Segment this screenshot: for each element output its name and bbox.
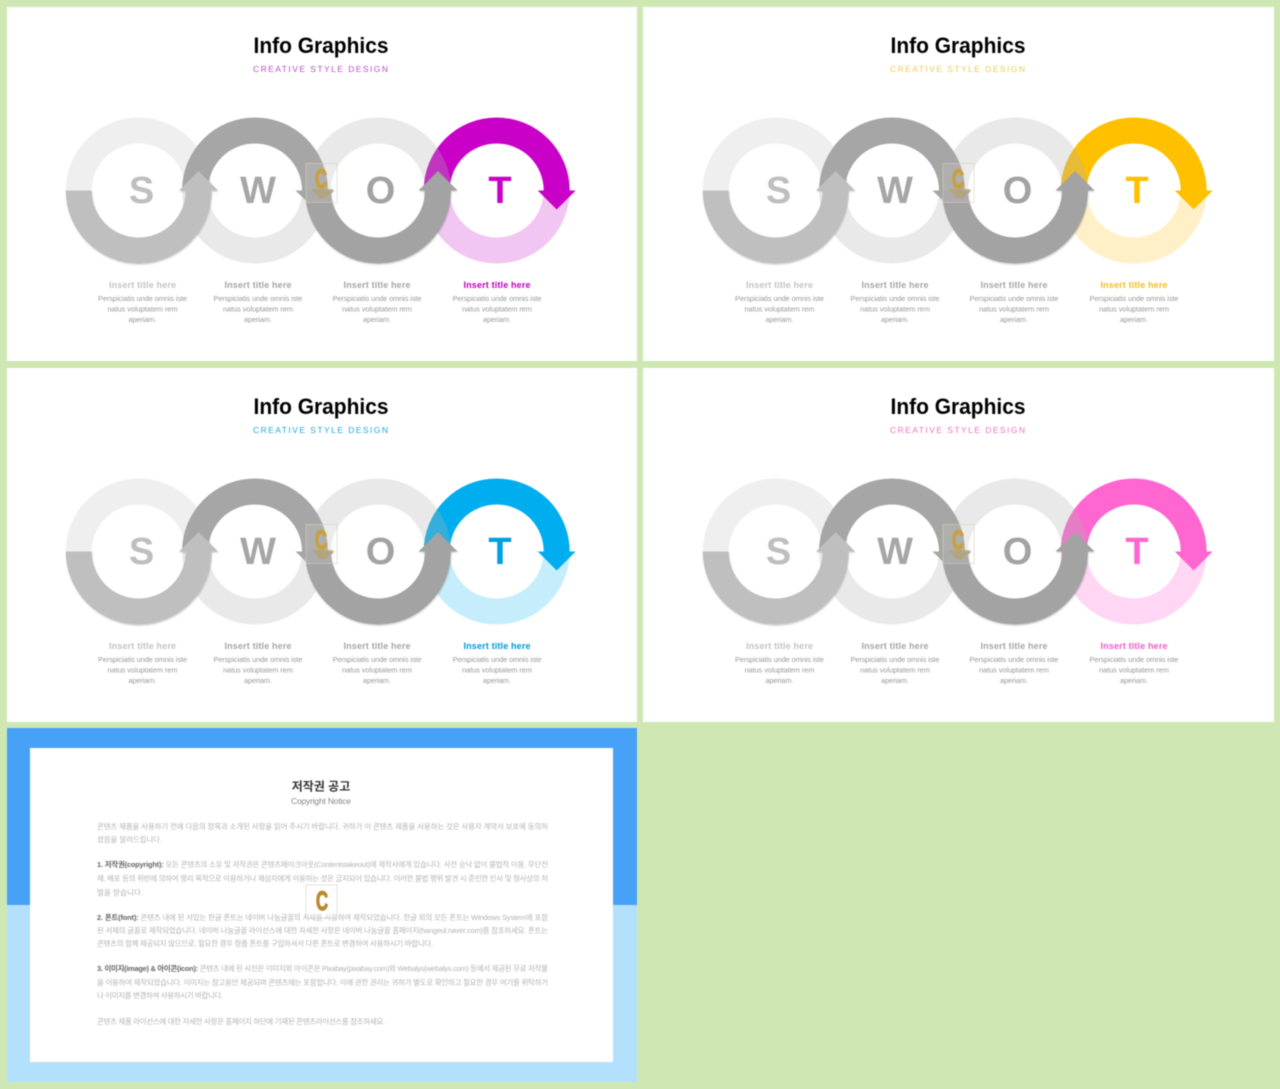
text block: section 1 copyright: 재, 배포 등의 위반에 의하여 영리 목적으로 이용하거나 제삼자에게 이용하는 것은 금지되어 있습니다. 이러한 불법 행위 발견 시 준민한 민사 및 형사상의 처	[97, 874, 548, 883]
letter O: O	[1003, 531, 1032, 573]
caption O: aperiam.	[363, 315, 391, 324]
letter S: S	[766, 170, 791, 212]
letter W: W	[240, 170, 276, 212]
caption O: Insert title here	[344, 641, 410, 651]
caption T	[452, 641, 542, 685]
panel: SWOT magenta	[7, 7, 637, 361]
caption S: Perspiciatis unde omnis iste	[98, 655, 187, 664]
text block: section 2 font: 2. 폰트(font): 콘텐츠 내에 된 서있는 한글 폰트는 네이버 나눔글꼴의 서체를 사용하여 제작되었습니다. 한글 외의 모든 폰트는 Windows System에 포함	[97, 913, 548, 922]
caption W: Insert title here	[862, 280, 928, 290]
letter S: S	[129, 531, 154, 573]
caption T: natus voluptatem rem	[1099, 304, 1169, 314]
text block: intro	[97, 822, 548, 844]
icon: gold C watermark: C	[315, 525, 327, 555]
caption O: natus voluptatem rem	[979, 666, 1049, 674]
text block: section 2 font: 된 서체의 글꼴로 제작되었습니다. 네이버 나눔글꼴 라이선스에 대한 자세한 사항은 네이버 나눔글꼴 홈페이지(hangeul.naver.com)를 참조하세요. 폰트는	[97, 926, 548, 935]
caption T: Insert title here	[464, 280, 530, 290]
caption O: natus voluptatem rem	[342, 304, 412, 314]
caption O: Perspiciatis unde omnis iste	[332, 655, 422, 664]
panel: SWOT blue	[7, 368, 637, 722]
caption O	[970, 280, 1058, 324]
title: Info Graphics	[890, 33, 1026, 58]
icon: gold C watermark: C	[952, 164, 964, 194]
caption W: Perspiciatis unde omnis iste	[850, 655, 940, 664]
caption S: aperiam.	[128, 315, 156, 324]
caption O: Perspiciatis unde omnis iste	[332, 294, 422, 303]
text block: section 2 font: 콘텐츠의 함께 제공되지 않으므로, 필요한 경우 정품 폰트를 구입하셔서 다른 폰트로 변경하여 사용하시기 바랍니다.	[97, 939, 433, 948]
caption S	[98, 280, 187, 324]
caption O: Insert title here	[980, 641, 1048, 651]
letter W: W	[877, 531, 913, 573]
letter T: T	[1125, 531, 1149, 573]
icon: gold C watermark	[306, 164, 337, 202]
caption O: aperiam.	[1000, 676, 1028, 685]
caption S: natus voluptatem rem	[744, 666, 814, 674]
letter T: T	[488, 531, 512, 573]
caption W: natus voluptatem rem	[223, 304, 293, 314]
caption S: natus voluptatem rem	[108, 304, 178, 314]
caption O: Perspiciatis unde omnis iste	[970, 655, 1058, 664]
caption W: natus voluptatem rem	[860, 304, 930, 314]
icon: gold C watermark	[306, 885, 337, 918]
caption O: aperiam.	[1000, 315, 1028, 324]
chart: SWOT interlocking arrows	[66, 478, 576, 624]
caption T: natus voluptatem rem	[462, 304, 532, 314]
caption S: Perspiciatis unde omnis iste	[735, 655, 824, 664]
letter O: O	[366, 531, 395, 573]
text block: section 1 copyright: 벌을 받습니다.	[97, 888, 143, 897]
caption T: natus voluptatem rem	[462, 666, 532, 674]
caption S: Insert title here	[109, 641, 176, 651]
text block: section 3 image and icon	[97, 964, 548, 1000]
caption T: aperiam.	[483, 315, 511, 324]
heading: copyright notice: 저작권 공고	[292, 778, 350, 794]
caption T: natus voluptatem rem	[1099, 666, 1169, 674]
caption T	[452, 280, 542, 324]
caption T: Insert title here	[1100, 641, 1168, 651]
caption S: Perspiciatis unde omnis iste	[735, 294, 824, 303]
caption O: Insert title here	[980, 280, 1048, 290]
caption O: Insert title here	[344, 280, 410, 290]
caption T: Perspiciatis unde omnis iste	[1090, 655, 1178, 664]
icon: gold C watermark	[306, 524, 337, 564]
letter O: O	[1003, 170, 1032, 212]
caption O: aperiam.	[363, 676, 391, 685]
caption W: natus voluptatem rem	[860, 666, 930, 674]
subtitle: CREATIVE STYLE DESIGN	[253, 64, 388, 74]
caption W: Perspiciatis unde omnis iste	[214, 294, 302, 303]
caption T: Insert title here	[464, 641, 530, 651]
caption O	[332, 280, 422, 324]
text block: section 1 copyright: 1. 저작권(copyright): 모든 콘텐츠의 소유 및 저작권은 콘텐츠메이크아웃(Contentstakeout)에 제작사에게 있습니다. 사전 승낙 없이 불법적 이용, 무단전	[97, 860, 548, 869]
chart: SWOT interlocking arrows	[703, 478, 1213, 624]
chart: SWOT interlocking arrows	[703, 118, 1213, 264]
letter T: T	[488, 170, 512, 212]
subtitle: CREATIVE STYLE DESIGN	[890, 425, 1025, 435]
caption T: aperiam.	[483, 676, 511, 685]
letter O: O	[366, 170, 395, 212]
caption W: Insert title here	[224, 280, 292, 290]
caption O	[970, 641, 1058, 685]
text block: section 3 image and icon: 을 이용하여 제작되었습니다. 이미지는 참고용만 제공되며 콘텐츠에는 포함합니다. 이에 관한 권리는 귀하가 별도로 확인하고 필요한 경우 여기를 위탁하거	[97, 978, 548, 987]
caption S: natus voluptatem rem	[744, 304, 814, 314]
panel: SWOT yellow	[643, 7, 1274, 361]
caption W: aperiam.	[881, 315, 909, 324]
caption W	[214, 280, 302, 324]
letter W: W	[877, 170, 913, 212]
letter W: W	[240, 531, 276, 573]
caption W: Perspiciatis unde omnis iste	[850, 294, 940, 303]
caption S: Perspiciatis unde omnis iste	[98, 294, 187, 303]
panel: copyright notice	[7, 728, 637, 1082]
caption T: Perspiciatis unde omnis iste	[452, 655, 542, 664]
caption W	[850, 280, 940, 324]
caption W: Perspiciatis unde omnis iste	[214, 655, 302, 664]
icon: gold C watermark: C	[952, 525, 964, 555]
caption O: natus voluptatem rem	[342, 666, 412, 674]
caption S: aperiam.	[766, 315, 794, 324]
caption S: Insert title here	[746, 280, 813, 290]
title: Info Graphics	[254, 33, 388, 58]
caption S	[735, 280, 824, 324]
letter S: S	[129, 170, 154, 212]
caption S: aperiam.	[766, 676, 794, 685]
subheading: Copyright Notice	[291, 796, 351, 806]
caption W	[850, 641, 940, 685]
text block: section 3 image and icon: 3. 이미지(image) & 아이콘(icon): 콘텐츠 내에 된 사진은 이미지와 아이콘은 Pixabay(pixabay.com)와 Webalys(webalys.com) 등에서 제공된 무료 저작물	[97, 964, 548, 973]
caption O: natus voluptatem rem	[979, 304, 1049, 314]
text block: section 2 font	[97, 913, 548, 948]
text block: closing note: 콘텐츠 제품 라이선스에 대한 자세한 사항은 홈페이지 하단에 기재된 콘텐츠라이선스를 참조하세요.	[97, 1017, 385, 1026]
caption W: Insert title here	[224, 641, 292, 651]
panel: SWOT pink	[643, 368, 1274, 722]
caption T	[1090, 280, 1178, 324]
caption T: aperiam.	[1120, 676, 1148, 685]
caption S: aperiam.	[128, 676, 156, 685]
caption T: Insert title here	[1100, 280, 1168, 290]
caption W: natus voluptatem rem	[223, 666, 293, 674]
caption S: Insert title here	[109, 280, 176, 290]
subtitle: CREATIVE STYLE DESIGN	[253, 425, 388, 435]
icon: gold C watermark: C	[315, 164, 327, 194]
caption W: aperiam.	[244, 676, 272, 685]
title: Info Graphics	[254, 394, 388, 419]
caption T: Perspiciatis unde omnis iste	[1090, 294, 1178, 303]
subtitle: CREATIVE STYLE DESIGN	[890, 64, 1025, 74]
caption W	[214, 641, 302, 685]
caption T: aperiam.	[1120, 315, 1148, 324]
caption W: aperiam.	[244, 315, 272, 324]
text block: intro: 콘텐츠 제품을 사용하기 전에 다음의 항목과 소개된 사항을 읽어 주시기 바랍니다. 귀하가 이 콘텐츠 제품을 사용하는 것은 사용자 계약서 보호에 동의하	[97, 822, 548, 831]
caption O	[332, 641, 422, 685]
title: Info Graphics	[890, 394, 1026, 419]
caption W: aperiam.	[881, 676, 909, 685]
caption W: Insert title here	[862, 641, 928, 651]
icon: gold C watermark	[943, 164, 974, 202]
letter T: T	[1125, 170, 1149, 212]
caption S	[98, 641, 187, 685]
icon: gold C watermark: C	[316, 886, 328, 916]
letter S: S	[766, 531, 791, 573]
caption O: Perspiciatis unde omnis iste	[970, 294, 1058, 303]
caption S: natus voluptatem rem	[108, 666, 178, 674]
icon: gold C watermark	[943, 524, 974, 564]
text block: section 1 copyright	[97, 860, 548, 897]
caption T: Perspiciatis unde omnis iste	[452, 294, 542, 303]
caption S	[735, 641, 824, 685]
chart: SWOT interlocking arrows	[66, 118, 576, 264]
caption T	[1090, 641, 1178, 685]
text block: intro: 셨음을 알려드립니다.	[97, 835, 162, 844]
text block: section 3 image and icon: 나 이미지를 변경하여 사용하시기 바랍니다.	[97, 991, 223, 1000]
caption S: Insert title here	[746, 641, 813, 651]
